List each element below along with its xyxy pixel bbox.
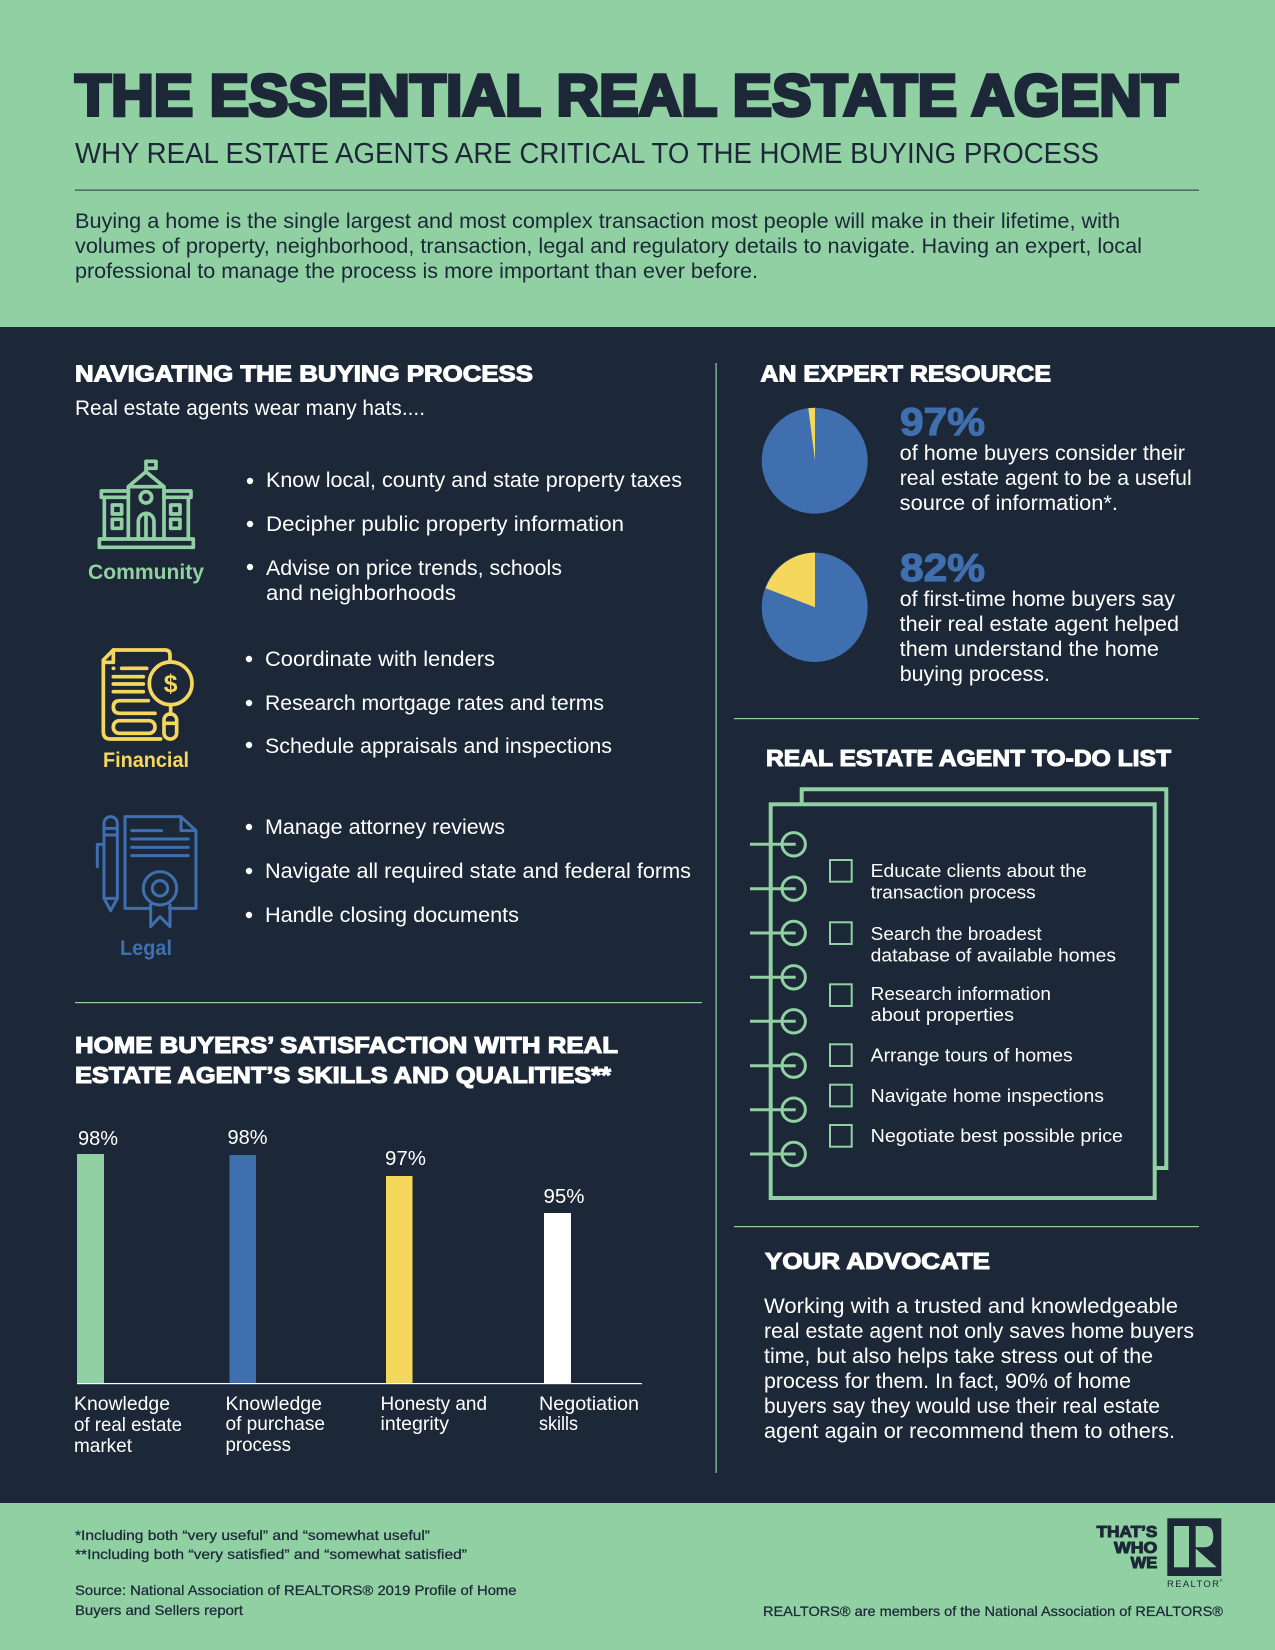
bar chart: of real estate [74, 1414, 182, 1436]
stat: 82% [900, 547, 1179, 686]
panel: home buyers' satisfaction [74, 1032, 642, 1457]
to-do items: transaction process [871, 881, 1036, 902]
icon: legal document and pencil [97, 817, 196, 927]
heading: expert resource: AN EXPERT RESOURCE [760, 360, 1051, 386]
bar chart: 98% [228, 1127, 268, 1149]
list: legal tasks: Manage attorney reviews [265, 816, 505, 839]
heading: satisfaction: ESTATE AGENT’S SKILLS AND QUALITIES** [75, 1062, 611, 1088]
heading: to-do list: REAL ESTATE AGENT TO-DO LIST [766, 745, 1171, 771]
pie chart: 97% [762, 408, 868, 514]
list: legal tasks [246, 816, 691, 927]
stat: 97%: of home buyers consider their [900, 441, 1185, 465]
icon: financial document with magnifier: $ [164, 671, 178, 698]
logo: realtor R [1167, 1518, 1222, 1590]
panel: header [0, 0, 1275, 327]
advocate paragraph: Working with a trusted and knowledgeable [764, 1294, 1178, 1318]
heading: satisfaction: HOME BUYERS’ SATISFACTION WITH REAL [75, 1032, 618, 1058]
intro paragraph: Buying a home is the single largest and most complex transaction most people will make in their lifetime, with [75, 210, 1120, 233]
stat: 97%: 97% [900, 401, 985, 444]
list: financial tasks [246, 648, 612, 758]
stat: 82%: them understand the home [900, 637, 1159, 661]
intro paragraph: volumes of property, neighborhood, transaction, legal and regulatory details to navigate. Having an expert, local [75, 235, 1142, 258]
bar chart [74, 1127, 642, 1457]
membership note: REALTORS® are members of the National Association of REALTORS® [763, 1603, 1224, 1619]
list: community tasks: Advise on price trends, schools [266, 557, 562, 580]
panel: dark main background [0, 327, 1275, 1503]
advocate paragraph: time, but also helps take stress out of the [764, 1344, 1153, 1368]
pie chart: 82% [762, 553, 868, 662]
bar chart: 98% [78, 1128, 118, 1150]
slogan: that's who we [1097, 1524, 1157, 1572]
list: community tasks: and neighborhoods [266, 582, 456, 605]
checkboxes [830, 860, 852, 1147]
subtitle: WHY REAL ESTATE AGENTS ARE CRITICAL TO THE HOME BUYING PROCESS [75, 138, 1099, 170]
label: financial: Financial [103, 749, 189, 772]
to-do items: Arrange tours of homes [871, 1044, 1073, 1065]
list: community tasks [247, 469, 682, 605]
list: financial tasks: Schedule appraisals and inspections [265, 735, 612, 758]
stat: 82%: their real estate agent helped [900, 612, 1179, 636]
stat: 82%: buying process. [900, 662, 1050, 686]
to-do items: about properties [871, 1004, 1014, 1025]
subheading: many hats: Real estate agents wear many hats.... [75, 397, 425, 420]
bar chart: skills [539, 1413, 578, 1435]
footnotes: *Including both “very useful” and “somewhat useful” [75, 1527, 430, 1543]
advocate paragraph [764, 1294, 1194, 1443]
advocate paragraph: real estate agent not only saves home buyers [764, 1319, 1194, 1343]
to-do items: Educate clients about the [871, 860, 1087, 881]
heading: your advocate: YOUR ADVOCATE [765, 1248, 990, 1274]
bar chart: Negotiation [539, 1393, 639, 1415]
notebook pages [771, 789, 1166, 1198]
title: THE ESSENTIAL REAL ESTATE AGENT [75, 64, 1178, 128]
stat: 97% [900, 401, 1192, 515]
label: community: Community [88, 561, 204, 584]
source note [75, 1582, 517, 1618]
stat: 97%: real estate agent to be a useful [900, 466, 1192, 490]
bar chart: Knowledge [226, 1393, 322, 1415]
slogan: that's who we: WE [1131, 1555, 1157, 1572]
intro paragraph [75, 210, 1142, 283]
notebook spiral rings [750, 833, 805, 1166]
stat: 97%: source of information*. [900, 491, 1118, 515]
stat: 82%: of first-time home buyers say [900, 587, 1175, 611]
source note: Buyers and Sellers report [75, 1602, 243, 1618]
slogan: that's who we: THAT’S [1097, 1524, 1157, 1541]
to-do items: database of available homes [871, 944, 1116, 965]
list: financial tasks: Coordinate with lenders [265, 648, 495, 671]
logo: realtor R: ® [1220, 1578, 1222, 1583]
footnotes: **Including both “very satisfied” and “somewhat satisfied” [75, 1546, 467, 1562]
label: legal: Legal [120, 937, 172, 960]
bar chart: Honesty and [380, 1393, 487, 1415]
bar chart: of purchase [226, 1413, 325, 1435]
source note: Source: National Association of REALTORS® 2019 Profile of Home [75, 1582, 517, 1598]
panel: navigating the buying process [75, 360, 691, 960]
panel: an expert resource [760, 360, 1192, 686]
heading: satisfaction [75, 1032, 618, 1088]
list: legal tasks: Handle closing documents [265, 904, 519, 927]
bar chart: process [226, 1434, 291, 1456]
list: financial tasks: Research mortgage rates and terms [265, 692, 604, 715]
footnotes [75, 1527, 467, 1562]
list: legal tasks: Navigate all required state and federal forms [265, 860, 691, 883]
to-do items: Search the broadest [871, 923, 1042, 944]
to-do items: Negotiate best possible price [871, 1125, 1123, 1146]
bar chart: 95% [544, 1186, 585, 1208]
logo: realtor R: REALTOR [1167, 1579, 1219, 1590]
stat: 82%: 82% [900, 547, 985, 590]
list: community tasks: Decipher public property information [266, 513, 624, 536]
slogan: that's who we: WHO [1114, 1540, 1157, 1557]
list: community tasks: Know local, county and state property taxes [266, 469, 682, 492]
advocate paragraph: agent again or recommend them to others. [764, 1419, 1175, 1443]
bar chart: Knowledge [74, 1393, 170, 1415]
to-do items [871, 860, 1123, 1146]
intro paragraph: professional to manage the process is more important than ever before. [75, 260, 758, 283]
panel: footer [0, 1503, 1275, 1650]
panel: to-do list [750, 745, 1171, 1198]
bar chart: integrity [380, 1413, 449, 1435]
icon: community building [99, 461, 193, 547]
advocate paragraph: buyers say they would use their real estate [764, 1394, 1160, 1418]
icon: financial document with magnifier [103, 650, 192, 739]
panel: your advocate [764, 1248, 1194, 1443]
bar chart: market [74, 1435, 133, 1457]
bar chart: 97% [385, 1148, 426, 1170]
to-do items: Research information [871, 983, 1051, 1004]
heading: navigating: NAVIGATING THE BUYING PROCESS [75, 360, 533, 386]
to-do items: Navigate home inspections [871, 1085, 1104, 1106]
advocate paragraph: process for them. In fact, 90% of home [764, 1369, 1131, 1393]
